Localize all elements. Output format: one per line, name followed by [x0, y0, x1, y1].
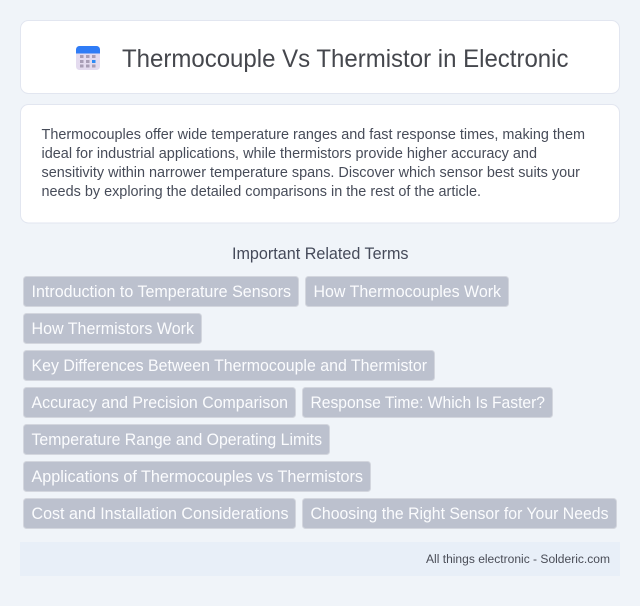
footer	[20, 542, 620, 576]
tag: applications: Applications of Thermocouples vs Thermistors	[32, 468, 363, 486]
panel: related term tags	[24, 276, 616, 528]
tag: key differences: Key Differences Between Thermocouple and Thermistor	[32, 357, 428, 375]
tag: accuracy: Accuracy and Precision Comparison	[32, 394, 288, 412]
panel: title header	[20, 20, 620, 94]
tag: cost: Cost and Installation Considerations	[32, 505, 288, 523]
tag: how thermocouples work: How Thermocouples Work	[314, 283, 502, 301]
tag: choosing	[302, 498, 616, 528]
text block: introduction paragraph	[42, 127, 585, 200]
tag: introduction: Introduction to Temperature Sensors	[32, 283, 291, 301]
text block: introduction paragraph: sensitivity within narrower temperature spans. Discover which sensor best suits your	[42, 165, 580, 181]
tag: choosing: Choosing the Right Sensor for Your Needs	[310, 505, 608, 523]
text block: introduction paragraph: Thermocouples offer wide temperature ranges and fast response times, making them	[42, 127, 585, 143]
icon: calendar	[76, 46, 100, 70]
tag: temperature range: Temperature Range and Operating Limits	[32, 431, 322, 449]
tag: how thermistors work	[24, 314, 202, 344]
footer: All things electronic - Solderic.com	[426, 552, 610, 566]
tag: how thermistors work: How Thermistors Work	[32, 320, 195, 338]
tag: key differences	[24, 350, 434, 380]
panel: introduction	[20, 104, 620, 223]
tag: how thermocouples work	[306, 276, 508, 306]
tag: response time	[302, 388, 552, 418]
tag: cost	[24, 498, 296, 528]
tag: applications	[24, 462, 370, 492]
tag: accuracy	[24, 388, 296, 418]
tag: temperature range	[24, 424, 330, 454]
text block: introduction paragraph: needs by exploring the detailed comparisons in the rest of the article.	[42, 184, 481, 200]
tag: response time: Response Time: Which Is Faster?	[310, 394, 545, 412]
tag: introduction	[24, 276, 298, 306]
title: Thermocouple Vs Thermistor in Electronic	[122, 46, 568, 73]
text block: introduction paragraph: ideal for industrial applications, while thermistors provide higher accuracy and	[42, 146, 537, 162]
heading: related terms: Important Related Terms	[232, 245, 408, 263]
